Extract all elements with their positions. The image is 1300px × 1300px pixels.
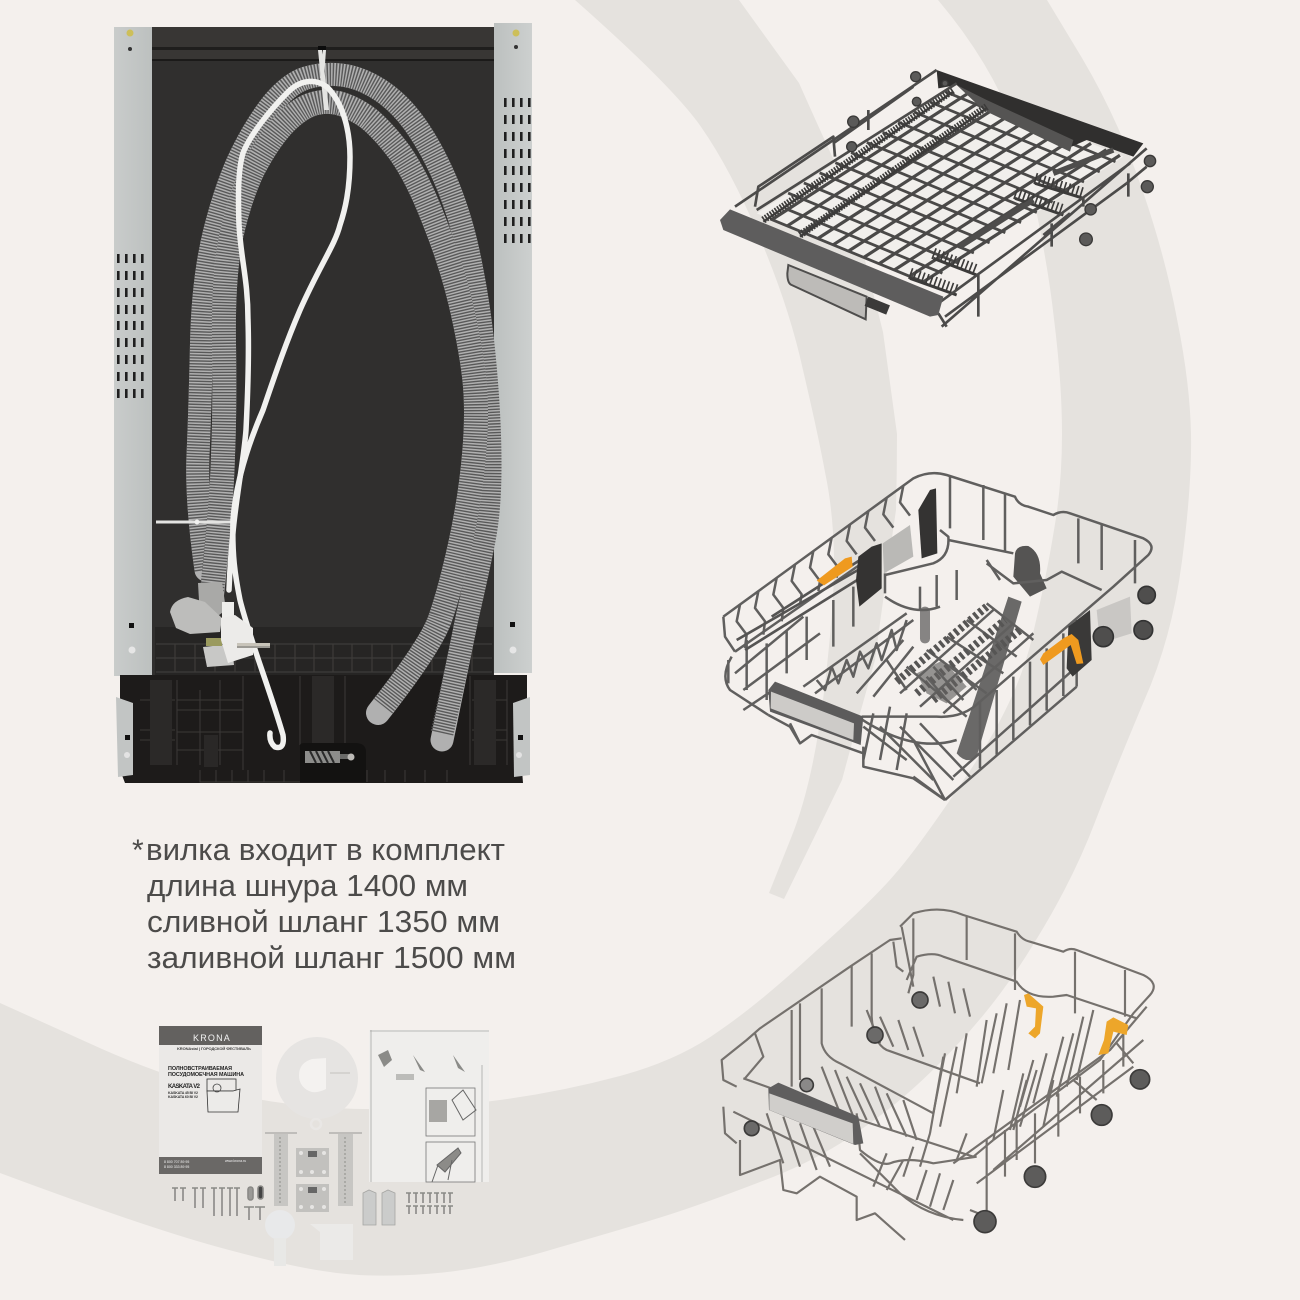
line: inlet hose length: заливной шланг 1500 мм xyxy=(147,940,516,975)
plate basket xyxy=(803,613,913,693)
line: cord length: длина шнура 1400 мм xyxy=(147,868,468,903)
instruction manual: 8 800 333 89 95 xyxy=(164,1165,189,1169)
back wall wires xyxy=(902,917,1137,1018)
tray floor xyxy=(757,87,1123,283)
inlet hose xyxy=(212,102,476,713)
dishwasher back view xyxy=(114,23,532,783)
lower dish rack xyxy=(722,910,1154,1240)
tray grid xyxy=(757,87,1123,283)
slider plate xyxy=(1097,597,1132,643)
left scalloped wall xyxy=(737,486,910,648)
front lower wires xyxy=(743,687,970,800)
left wall rim xyxy=(722,938,902,1143)
middle dish rack xyxy=(723,473,1155,800)
round template disc xyxy=(276,1037,358,1129)
mounting strips xyxy=(265,1133,362,1206)
lower black plinth xyxy=(120,675,527,783)
metal plates xyxy=(296,1148,329,1212)
cutlery holder xyxy=(917,660,967,703)
cutlery tines xyxy=(897,607,1020,700)
back wall wires xyxy=(885,477,1135,610)
front handle xyxy=(768,1083,863,1145)
front rim and bottom xyxy=(733,1078,993,1240)
instruction manual: KASKATA V2 xyxy=(168,1084,201,1090)
instruction manual: KRONA xyxy=(193,1033,231,1043)
rack wheels xyxy=(1093,586,1155,647)
floor tines, front section xyxy=(767,1047,1037,1210)
front right wall wires xyxy=(913,620,1077,800)
funnel and measuring cup xyxy=(265,1210,353,1266)
line: plug included: вилка входит в комплект xyxy=(146,832,505,867)
left folding shelf xyxy=(737,560,873,650)
tray wheels xyxy=(847,72,1156,246)
instruction manual xyxy=(159,1026,262,1174)
white power cable with plug xyxy=(229,81,350,748)
drain hose xyxy=(198,74,490,740)
right dark clip plate xyxy=(1067,610,1092,677)
black rear panel xyxy=(152,27,494,677)
swirl band: inner crescent xyxy=(575,0,897,899)
adjustment wheel xyxy=(305,751,354,763)
clip under handle xyxy=(865,297,890,315)
line: drain hose length: сливной шланг 1350 мм xyxy=(147,904,500,939)
lower metal brackets xyxy=(116,697,530,777)
tine rows xyxy=(763,90,1113,295)
spray arm xyxy=(920,546,1047,760)
orange rack clips xyxy=(1024,993,1128,1055)
instruction manual: www.krona.ru xyxy=(225,1159,246,1163)
upper cutlery tray xyxy=(720,70,1156,327)
top rim xyxy=(723,473,1152,717)
power plug xyxy=(221,602,270,663)
rack wheels xyxy=(744,992,1150,1233)
asterisk: * xyxy=(132,834,144,867)
top rim xyxy=(900,910,1154,1140)
left metal side rail xyxy=(114,27,153,676)
instruction manual: 8 800 707 89 95 xyxy=(164,1160,189,1164)
side rails xyxy=(735,70,1147,327)
specification note xyxy=(132,832,516,975)
floor tines, back section xyxy=(867,977,1093,1130)
front handle xyxy=(768,682,863,745)
instruction manual: KASKATA 45 BI V2 xyxy=(168,1091,198,1095)
rack wire frame xyxy=(722,910,1154,1240)
brackets xyxy=(363,1190,395,1225)
instruction manual: KASKATA 60 BI V2 xyxy=(168,1095,198,1099)
left wall wires xyxy=(745,942,980,1113)
silver label xyxy=(787,265,867,319)
instruction manual: KRONAstal | ГОРОДСКОЙ ФЕСТИВАЛЬ xyxy=(177,1046,251,1051)
front handle bar xyxy=(720,209,943,317)
cable ties xyxy=(156,50,329,524)
left dark clip plates xyxy=(856,488,937,607)
orange levers xyxy=(817,557,1083,665)
middle wires xyxy=(857,560,1033,717)
inlet valve xyxy=(170,582,234,667)
accessory kit xyxy=(159,1026,489,1266)
instruction manual: ПОЛНОВСТРАИВАЕМАЯ xyxy=(168,1066,232,1072)
screws and fasteners xyxy=(172,1186,453,1220)
back wall xyxy=(937,70,1143,157)
right wall wires xyxy=(953,1007,1147,1217)
left wall lower wires xyxy=(723,560,885,715)
installation sheet xyxy=(369,1030,489,1182)
rack wire frame xyxy=(723,473,1152,800)
right metal side rail xyxy=(494,23,532,673)
instruction manual: ПОСУДОМОЕЧНАЯ МАШИНА xyxy=(168,1072,244,1078)
